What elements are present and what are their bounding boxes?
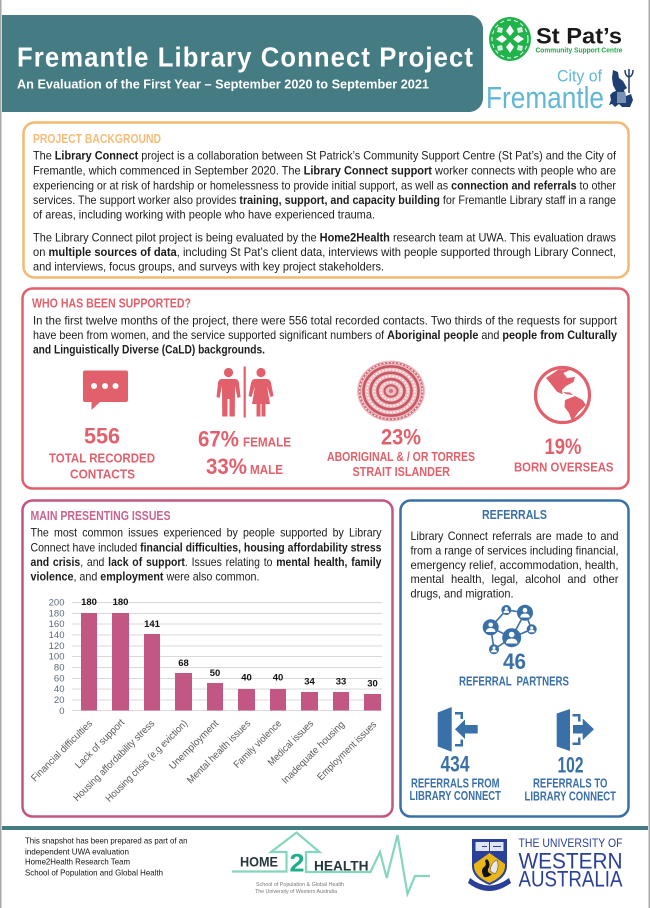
stat: total recorded contacts: TOTAL RECORDED [49,450,155,466]
text: evaluation description: The Library Connect pilot project is being evaluated by the Home2Health research team at UWA. This evaluation draws [33,230,616,244]
bar chart: presenting issues: 120 [49,641,64,652]
logo: University of Western Australia: WESTERN [518,848,622,874]
heading: project background: PROJECT BACKGROUND [33,131,161,146]
text: project description: Fremantle, which commenced in September 2020. The Library Connect support worker connects with people who are [33,164,616,178]
logo: University of Western Australia: THE UNIVERSITY OF [518,836,622,850]
bar chart: presenting issues: 100 [49,652,64,662]
stat: born overseas [514,368,614,474]
stat: referrals to Library Connect: REFERRALS TO [533,776,608,790]
icon: door with outward arrow [557,709,594,751]
heading: who has been supported: WHO HAS BEEN SUPPORTED? [32,296,191,310]
bar chart: presenting issues: 20 [54,695,64,706]
logo: City of Fremantle: City of [557,66,602,86]
stat: Aboriginal and Torres Strait Islander [327,360,475,479]
bar chart: presenting issues: 180 [81,597,97,608]
text: project description [33,148,617,222]
text: issues description [30,526,382,584]
stat: total recorded contacts: CONTACTS [70,466,135,482]
logo: University of Western Australia: AUSTRALIA [518,866,623,892]
heading: referrals: REFERRALS [482,507,547,522]
icon: network of people [483,605,537,654]
bar chart: presenting issues: Inadequate housing [280,719,347,787]
text: evaluation description [33,230,616,274]
icon: dot painting circle [357,360,425,422]
text: referrals description [410,529,618,600]
text: referrals description: Library Connect referrals are made to and [410,529,618,543]
bar chart: presenting issues: 60 [54,674,64,684]
bar chart: presenting issues: Medical issues [266,718,316,769]
stat: Aboriginal and Torres Strait Islander: ABORIGINAL & / OR TORRES [327,449,475,464]
icon: man and woman [216,366,274,418]
bar chart: presenting issues: 40 [273,672,283,684]
stat: born overseas: BORN OVERSEAS [514,460,614,474]
bar chart: presenting issues: 200 [49,598,64,608]
icon: speech bubble [83,370,128,410]
stat: born overseas: 19% [544,434,582,459]
stat: referral partners [459,605,569,688]
logo: Home 2 Health: The University of Western Australia [255,889,337,895]
icon: globe [536,368,590,422]
bar chart: presenting issues [29,597,382,805]
logo: Home 2 Health: HOME [240,854,278,870]
stat: gender: 33% [206,454,247,479]
logo: City of Fremantle [486,66,633,115]
panel: project background [24,122,628,278]
text: issues description: and crisis, and lack of support. Issues relating to mental health, family [30,555,382,569]
text: project description: The Library Connect project is a collaboration between St Patrick’s Community Support Centre (St Pat’s) and the City of [33,148,617,162]
bar chart: presenting issues: 160 [49,619,64,630]
bar chart: presenting issues: 80 [54,662,64,674]
logo: Home 2 Health [232,832,430,895]
stat: total recorded contacts [49,370,155,482]
footer bar [2,826,648,830]
subtitle: An Evaluation of the First Year – September 2020 to September 2021 [17,78,429,92]
logo: City of Fremantle: Fremantle [486,80,604,115]
stat: referrals from Library Connect: 434 [440,752,470,776]
heading: main presenting issues: MAIN PRESENTING ISSUES [30,508,171,523]
text: issues description: Connect have included financial difficulties, housing affordability stress [30,540,382,554]
text: referrals description: mental health, legal, alcohol and other [410,572,618,586]
footer note [25,836,188,878]
text: who description: and Linguistically Diverse (CaLD) backgrounds. [33,342,265,356]
bar chart: presenting issues: 180 [113,597,128,608]
bar chart: presenting issues: Employment issues [315,719,379,783]
text: referrals description: emergency relief, accommodation, health, [410,558,618,572]
stat: Aboriginal and Torres Strait Islander: 23% [381,424,421,450]
header banner [2,15,483,112]
stat: referrals to Library Connect: 102 [558,752,584,778]
stat: referrals to Library Connect [524,709,616,804]
logo: St Pat's [489,17,623,61]
logo: Home 2 Health: School of Population & Global Health [256,882,344,888]
text: project description: services. The support worker also provides training, support, and capacity building for Fremantle Library staff in a range [33,193,616,207]
bar chart: presenting issues: 30 [367,678,378,690]
text: project description: of areas, including working with people who have experienced trauma. [33,208,375,222]
stat: referral partners: 46 [503,649,526,674]
panel: who has been supported [22,288,628,488]
icon: door with inward arrow [438,707,478,752]
bar chart: presenting issues: Housing affordability stress [72,718,157,804]
bar chart: presenting issues: Lack of support [73,717,127,771]
stat: gender: FEMALE [243,434,291,450]
bar chart: presenting issues: 180 [49,608,64,620]
logo: University of Western Australia [468,836,623,892]
footer note: School of Population and Global Health [25,868,163,878]
text: evaluation description: on multiple sources of data, including St Pat’s client data, interviews with people supported through Library Connect, [33,245,616,259]
bar chart: presenting issues: Housing crisis (e.g eviction) [104,718,190,805]
stat: total recorded contacts: 556 [84,424,120,448]
text: issues description: The most common issues experienced by people supported by Library [30,526,382,540]
text: referrals description: drugs, and migration. [410,586,514,600]
panel: referrals [400,500,628,816]
stat: referrals from Library Connect: REFERRALS FROM [411,776,500,790]
logo: St Pat's: St Pat’s [536,24,622,48]
bar chart: presenting issues: Financial difficulties [29,718,95,784]
logo: St Pat's: Community Support Centre [536,48,623,54]
stat: Aboriginal and Torres Strait Islander: STRAIT ISLANDER [352,464,451,479]
text: referrals description: from a range of services including financial, [410,544,618,558]
bar chart: presenting issues: 141 [144,619,161,630]
panel: main presenting issues [22,500,392,816]
text: evaluation description: and interviews, focus groups, and surveys with key project stakeholders. [33,260,384,274]
text: issues description: violence, and employment were also common. [30,570,260,584]
stat: gender [198,366,291,479]
bar chart: presenting issues: 50 [210,668,220,679]
footer note: independent UWA evaluation [25,846,129,856]
title: Fremantle Library Connect Project [17,42,474,72]
footer note: Home2Health Research Team [25,856,130,866]
stat: gender: 67% [198,426,239,452]
footer note: This snapshot has been prepared as part of an [25,836,188,846]
bar chart: presenting issues: Family violence [232,718,284,771]
bar chart: presenting issues: 68 [178,658,189,669]
bar chart: presenting issues: 34 [304,676,315,688]
bar chart: presenting issues: 0 [59,706,64,717]
bar chart: presenting issues: 33 [336,676,346,688]
stat: referrals from Library Connect: LIBRARY CONNECT [410,788,501,803]
bar chart: presenting issues: 40 [241,672,252,684]
text: project description: experiencing or at risk of hardship or homelessness to provide initial support, as well as connection and referrals to other [33,178,616,192]
bar chart: presenting issues: 40 [54,684,64,695]
text: who description: have been from women, and the service supported significant numbers of Aboriginal people and people from Culturally [33,328,617,342]
text: who description [33,314,618,356]
stat: referrals to Library Connect: LIBRARY CONNECT [524,788,616,804]
stat: referral partners: REFERRAL PARTNERS [459,674,569,688]
logo: Home 2 Health: HEALTH [314,858,368,874]
stat: gender: MALE [250,462,283,477]
bar chart: presenting issues: Unemployment [167,718,221,772]
logo: Home 2 Health: 2 [290,850,304,878]
text: who description: In the first twelve months of the project, there were 556 total recorded contacts. Two thirds of the requests for support [33,314,618,328]
bar chart: presenting issues: Mental health issues [185,718,253,786]
bar chart: presenting issues: 140 [49,630,64,641]
stat: referrals from Library Connect [410,707,501,803]
